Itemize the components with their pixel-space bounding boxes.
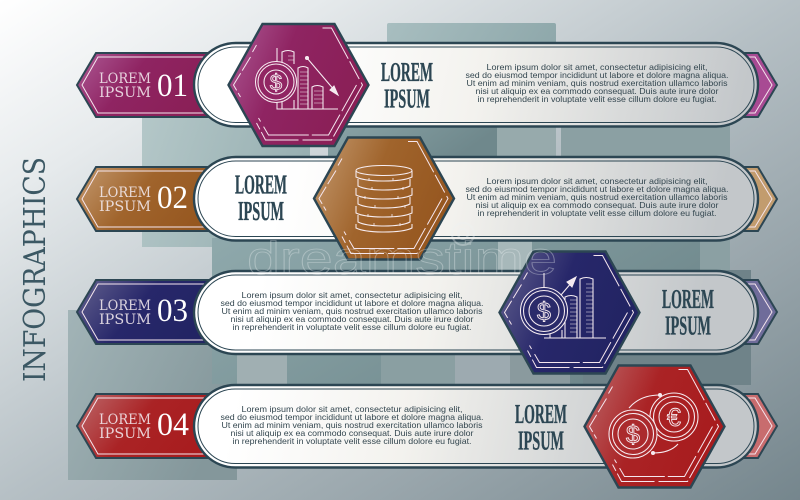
body text 1: sed do eiusmod tempor incididunt ut labore et dolore magna aliqua. — [466, 71, 728, 80]
pill panel 1 — [194, 43, 758, 126]
heading 3 — [662, 284, 714, 340]
hexagon 1 with icon: falling coins — [228, 24, 368, 146]
tab 01 — [77, 53, 225, 117]
body text 3: Lorem ipsum dolor sit amet, consectetur adipisicing elit, — [242, 291, 462, 300]
tab 03: 03 — [157, 293, 188, 329]
tab 03: LOREM — [99, 298, 151, 314]
tab 04: LOREM — [99, 412, 151, 428]
heading 3: IPSUM — [665, 310, 711, 340]
hexagon 4 with icon: currency exchange — [584, 366, 724, 488]
arrow: right rose — [735, 394, 777, 458]
body text 4: nisi ut aliquip ex ea commodo consequat. Duis aute irure dolor — [230, 429, 474, 438]
tab 04: 04 — [157, 407, 189, 443]
row 1 — [77, 24, 777, 146]
heading 1: IPSUM — [384, 84, 430, 114]
body text 3 — [220, 291, 484, 332]
body text 2: Lorem ipsum dolor sit amet, consectetur adipisicing elit, — [486, 177, 708, 186]
body text 4 — [220, 405, 484, 446]
heading 4: IPSUM — [518, 426, 564, 456]
hexagon 4 with icon: currency exchange: € — [667, 404, 681, 432]
tab 02: 02 — [157, 180, 188, 216]
tab 01: 01 — [157, 68, 188, 104]
arrow: right slate — [735, 280, 777, 344]
body text 1: nisi ut aliquip ex ea commodo consequat. Duis aute irure dolor — [476, 87, 719, 96]
heading 3: LOREM — [662, 284, 714, 314]
pill panel 2 — [194, 157, 758, 240]
heading 2 — [235, 170, 287, 226]
tab 01: LOREM — [99, 71, 151, 87]
watermark — [247, 223, 557, 284]
hexagon 3 with icon: rising coins: $ — [537, 298, 551, 326]
body text 3: nisi ut aliquip ex ea commodo consequat. Duis aute irure dolor — [230, 315, 474, 324]
hexagon 4 with icon: currency exchange: $ — [626, 421, 640, 449]
body text 4: Ut enim ad minim veniam, quis nostrud exercitation ullamco laboris — [222, 421, 482, 430]
body text 3: sed do eiusmod tempor incididunt ut labore et dolore magna aliqua. — [220, 299, 484, 308]
watermark: dreamstime — [247, 232, 557, 284]
hexagon 2 with icon: coin stack — [314, 138, 454, 260]
body text 2: in reprehenderit in voluptate velit esse cillum dolore eu fugiat. — [478, 209, 716, 218]
tab 02 — [77, 167, 225, 231]
tab 03: IPSUM — [99, 312, 151, 328]
hexagon 3 with icon: rising coins — [500, 252, 640, 374]
hexagon 1 with icon: falling coins: $ — [270, 70, 282, 95]
body text 2: nisi ut aliquip ex ea commodo consequat. Duis aute irure dolor — [476, 201, 719, 210]
body text 1: in reprehenderit in voluptate velit esse cillum dolore eu fugiat. — [478, 95, 716, 104]
tab 02: LOREM — [99, 185, 151, 201]
body text 1: Lorem ipsum dolor sit amet, consectetur adipisicing elit, — [486, 63, 708, 72]
title: infographics: INFOGRAPHICS — [18, 157, 53, 382]
tab 04: IPSUM — [99, 426, 151, 442]
tab 03 — [77, 280, 225, 344]
body text 4: in reprehenderit in voluptate velit esse cillum dolore eu fugiat. — [232, 437, 472, 446]
body text 3: in reprehenderit in voluptate velit esse cillum dolore eu fugiat. — [232, 323, 472, 332]
row 2 — [77, 138, 777, 260]
row 3 — [77, 252, 777, 374]
pill panel 3 — [194, 271, 758, 354]
body text 1 — [466, 63, 728, 104]
body text 2: sed do eiusmod tempor incididunt ut labore et dolore magna aliqua. — [466, 185, 728, 194]
tab 01: IPSUM — [99, 85, 151, 101]
body text 4: Lorem ipsum dolor sit amet, consectetur adipisicing elit, — [242, 405, 462, 414]
heading 1 — [381, 57, 433, 114]
heading 2: IPSUM — [238, 196, 284, 226]
tab 04 — [77, 394, 225, 458]
body text 1: Ut enim ad minim veniam, quis nostrud exercitation ullamco laboris — [466, 79, 728, 88]
heading 2: LOREM — [235, 170, 287, 200]
arrow: right tan — [735, 167, 777, 231]
arrow: right purple — [735, 53, 777, 117]
row 4 — [77, 366, 777, 488]
heading 4 — [515, 399, 567, 456]
heading 4: LOREM — [515, 399, 567, 429]
heading 1: LOREM — [381, 57, 433, 87]
body text 2 — [466, 177, 728, 218]
pill panel 4 — [194, 385, 758, 468]
body text 4: sed do eiusmod tempor incididunt ut labore et dolore magna aliqua. — [220, 413, 484, 422]
tab 02: IPSUM — [99, 199, 151, 215]
body text 3: Ut enim ad minim veniam, quis nostrud exercitation ullamco laboris — [222, 307, 482, 316]
body text 2: Ut enim ad minim veniam, quis nostrud exercitation ullamco laboris — [466, 193, 728, 202]
